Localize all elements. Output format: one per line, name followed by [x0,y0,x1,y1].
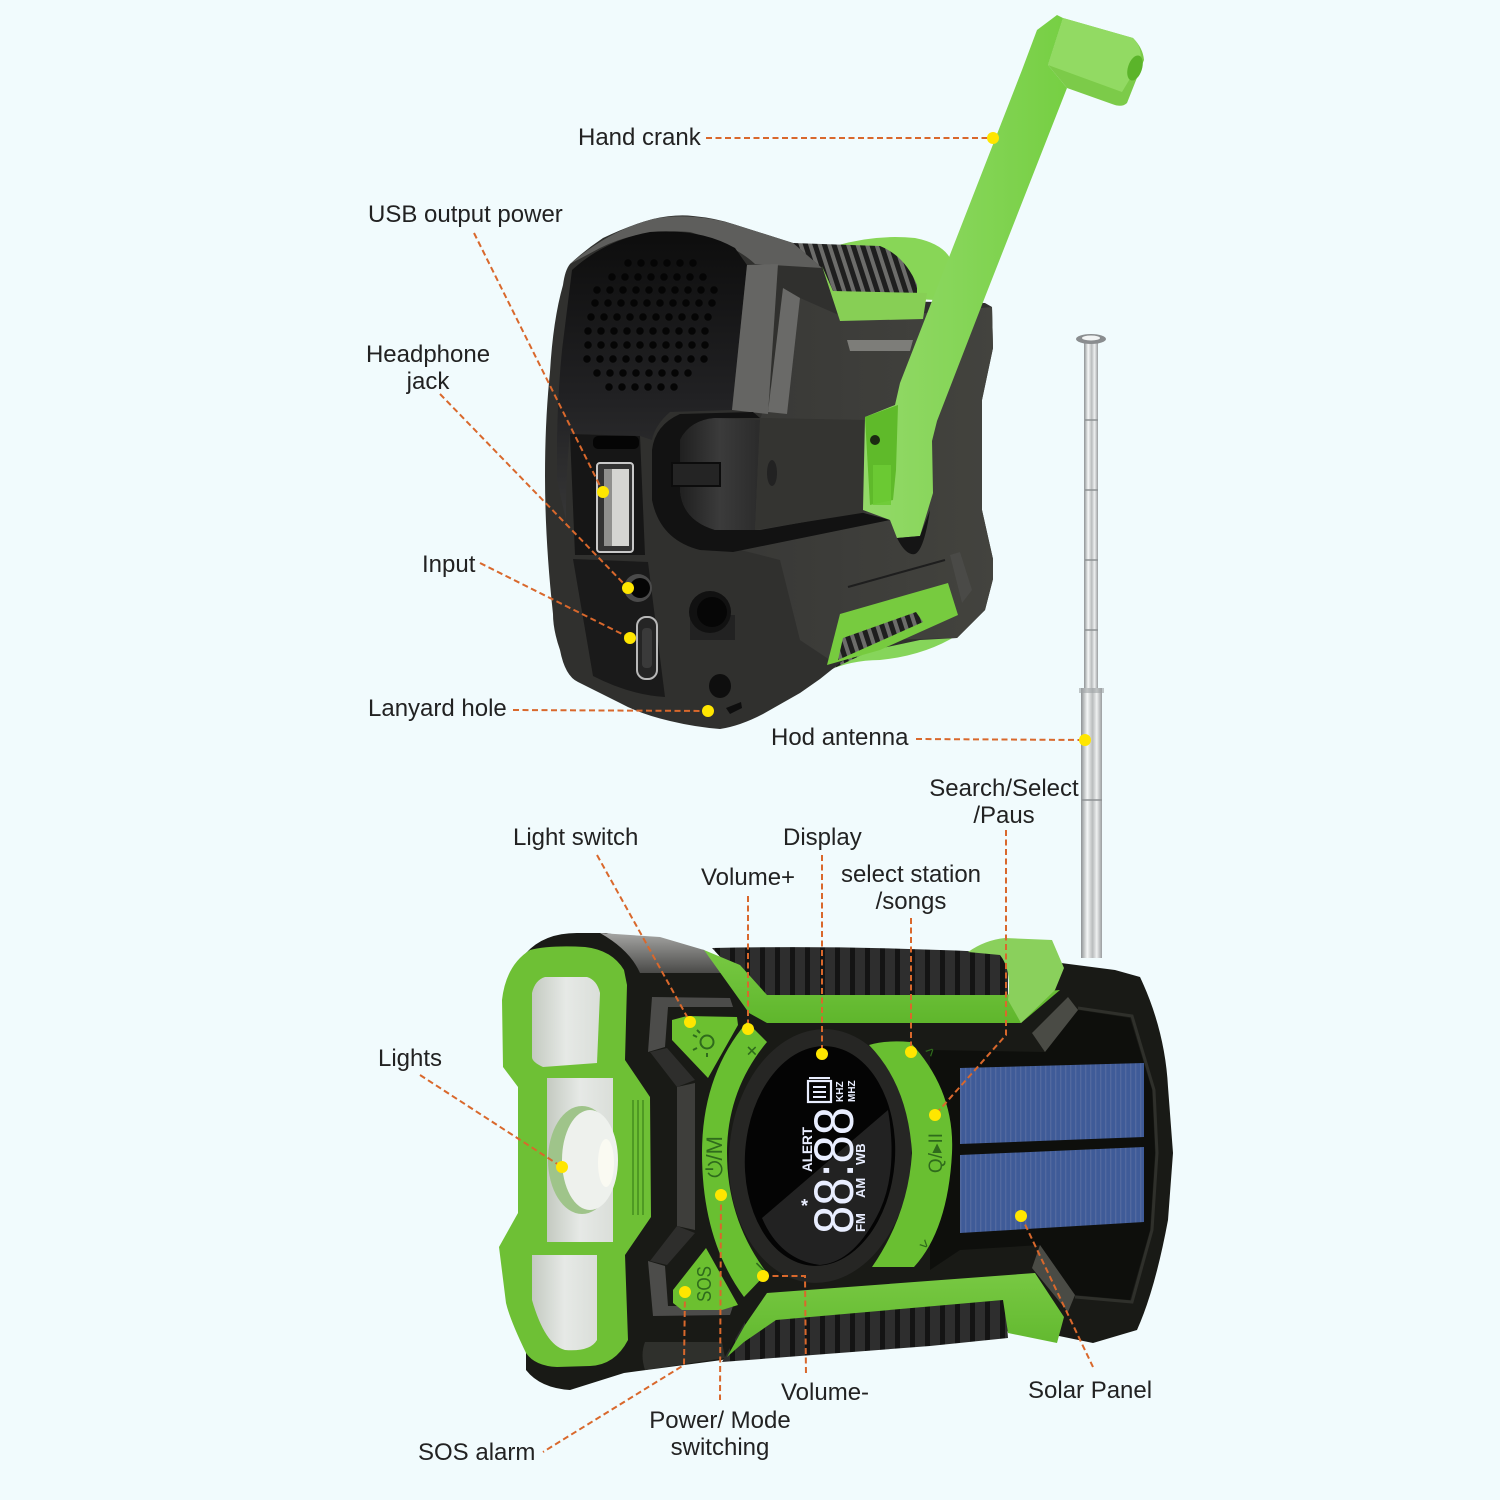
label: select station songs: /songs [876,888,946,915]
speaker grille [587,263,716,387]
right control arc: ^ [912,1232,932,1253]
bottom green [727,1273,1064,1357]
battery icon [808,1078,831,1102]
right block [733,298,993,660]
callout dots [556,132,1091,1298]
bottom ribs [826,612,918,672]
LCD labels: ALERT [799,1127,815,1172]
label: hod antenna: Hod antenna [771,724,909,751]
frame ridges [633,1100,643,1215]
SOS button: SOS [694,1266,716,1302]
right control arc [869,1041,952,1267]
main body [526,933,1173,1390]
label: search select pause: Search/Select [929,775,1079,802]
right control arc: ^ [918,1044,939,1064]
display ring: WB [853,1143,868,1165]
port panel [573,559,665,697]
crank handle [1048,18,1146,106]
left control arc: ⏻/M [702,1136,727,1178]
display ring [720,1023,920,1289]
label: volume plus: Volume+ [701,864,795,891]
lanyard hole [709,674,742,714]
USB port [597,463,633,552]
bottom ribs [722,1300,1008,1362]
solar panels [960,1063,1144,1233]
right panel recess [930,1010,1155,1300]
main body [545,215,993,729]
lower panel edge [848,560,945,587]
light button [672,1016,738,1078]
device: front view [499,933,1173,1390]
label: solar panel: Solar Panel [1028,1377,1152,1404]
label: headphone jack: jack [406,368,450,395]
label: USB output power: USB output power [368,201,563,228]
U-shaped cutout [652,412,890,552]
top ribs [712,947,1008,1000]
window top [532,977,600,1067]
SOS button [673,1248,738,1310]
window bottom [532,1255,597,1350]
top green hump [968,938,1064,1023]
side mid panel [755,418,868,530]
top green strip [704,950,1060,1023]
right panel trim [1032,997,1078,1312]
label: input: Input [422,551,476,578]
label: lanyard hole: Lanyard hole [368,695,507,722]
label: lights: Lights [378,1045,442,1072]
left bevel trim [648,997,733,1316]
green strip [822,266,927,321]
power port [689,591,735,640]
display gloss [762,1110,892,1265]
display ring: KHZ [835,1081,846,1102]
left control arc: − [747,1253,774,1280]
grey top bevel [600,933,722,973]
display ring: FM [853,1213,868,1232]
crank pivot [865,405,898,505]
right control arc: Q/▸II [926,1133,947,1173]
speaker face [557,231,747,520]
label: hand crank: Hand crank [578,124,702,151]
device: rear view with crank [545,15,1146,729]
green frame [499,946,651,1367]
display ring: * [801,1196,808,1216]
lower green frame [827,583,958,665]
label: display: Display [783,824,862,851]
top lip [570,216,822,268]
display ring: AM [853,1178,868,1198]
label: headphone jack: Headphone [366,341,490,368]
label: search select pause: /Paus [973,802,1035,829]
crank arm [863,15,1067,538]
label: power mode switching: Power/ Mode [649,1407,791,1434]
green ring top [835,237,952,300]
label: select station songs: select station [841,861,981,888]
top ribs [793,243,917,296]
USB-C port [637,617,657,679]
left control arc: + [738,1037,765,1064]
label: volume minus: Volume- [781,1379,869,1406]
lens [548,1106,618,1214]
label: power mode switching: switching [671,1434,769,1461]
USB bay [570,434,645,555]
headphone jack [624,574,652,602]
display ring: MHZ [847,1080,858,1102]
leader lines [420,138,1093,1452]
antenna [1076,334,1106,958]
label: SOS alarm: SOS alarm [418,1439,535,1466]
left control arc [702,1022,774,1297]
slot [593,436,639,449]
grey bottom bevel [642,1342,725,1370]
label: light switch: Light switch [513,824,638,851]
grey strips [732,264,778,414]
LCD digits: 88:88 [802,1107,865,1234]
window middle [547,1078,613,1242]
green ring bottom [825,600,965,672]
